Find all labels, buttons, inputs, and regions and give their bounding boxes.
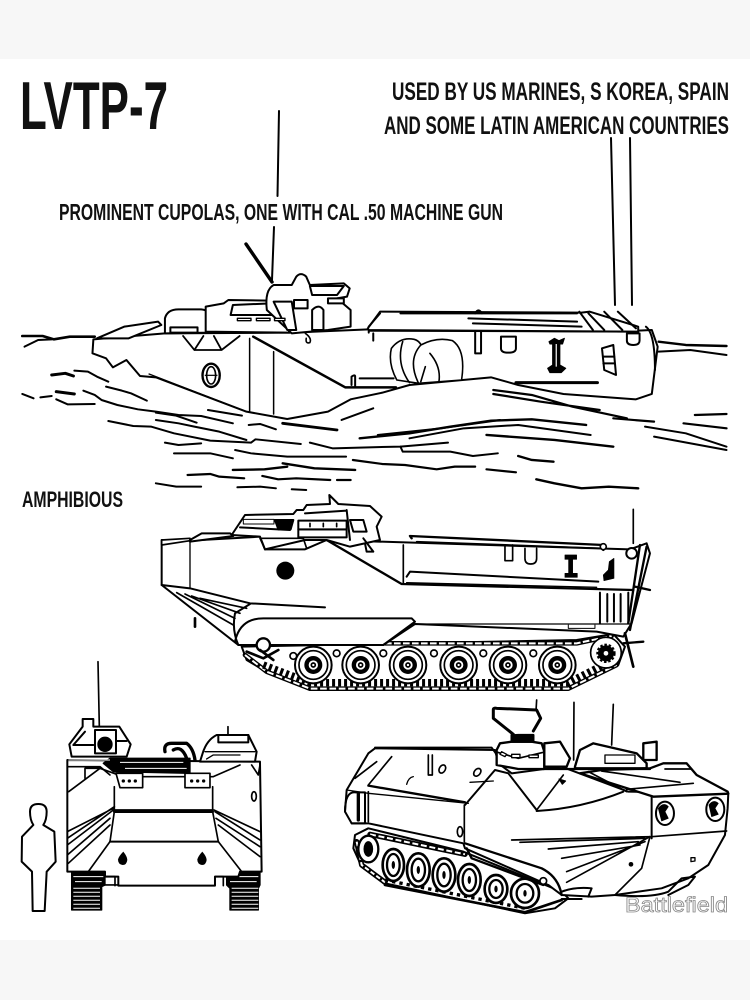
vehicle: three-quarter view — [345, 700, 728, 913]
cupolas — [190, 495, 382, 552]
hull — [92, 329, 658, 419]
hull detail — [345, 748, 727, 899]
hull detail — [149, 327, 655, 414]
side emblem — [548, 338, 566, 373]
person silhouette — [22, 804, 56, 911]
hull body — [67, 760, 262, 886]
tracks — [72, 872, 260, 910]
deck band — [103, 758, 190, 773]
hatch ports — [116, 773, 210, 788]
vehicle: amphibious side view in water — [22, 274, 727, 490]
hatches — [438, 764, 482, 837]
vehicle: front view — [67, 662, 262, 910]
rear ports — [656, 798, 724, 825]
hatch — [276, 562, 294, 580]
front idler — [247, 638, 278, 660]
bow top — [162, 538, 190, 545]
hull detail — [162, 536, 650, 667]
title: LVTP-7 — [20, 68, 168, 144]
antennas — [535, 700, 613, 760]
tracks — [353, 828, 568, 913]
waves behind — [22, 336, 727, 355]
drive sprocket — [591, 637, 621, 668]
road wheels — [295, 647, 576, 683]
side emblems — [565, 555, 577, 577]
antennas — [98, 662, 228, 735]
text: users — [384, 78, 729, 140]
hull body — [345, 748, 728, 897]
cupolas and deck gear — [97, 274, 638, 338]
deck gear rear — [544, 742, 728, 797]
text: cupolas note: PROMINENT CUPOLAS, ONE WITH CAL .50 MACHINE GUN — [59, 199, 503, 225]
watermark: Battlefield — [625, 894, 728, 917]
hull cutout triangle — [183, 336, 240, 350]
road wheels — [358, 836, 539, 908]
antenna lines: top vehicle — [246, 111, 632, 305]
return rollers between wheels — [290, 650, 537, 659]
text: amphibious: AMPHIBIOUS — [22, 487, 123, 512]
left cupola — [69, 719, 131, 757]
right cupola — [200, 735, 257, 762]
centre gun mount — [165, 743, 195, 760]
tow points — [118, 852, 207, 865]
hull inner panels — [67, 765, 260, 886]
porthole — [203, 364, 220, 387]
tracks — [242, 634, 625, 690]
antenna — [631, 509, 636, 543]
hull — [162, 537, 650, 645]
vehicle: side profile on tracks — [162, 495, 650, 690]
wave lines — [22, 371, 727, 490]
cupola with shield — [493, 708, 544, 769]
float bag — [390, 339, 463, 383]
